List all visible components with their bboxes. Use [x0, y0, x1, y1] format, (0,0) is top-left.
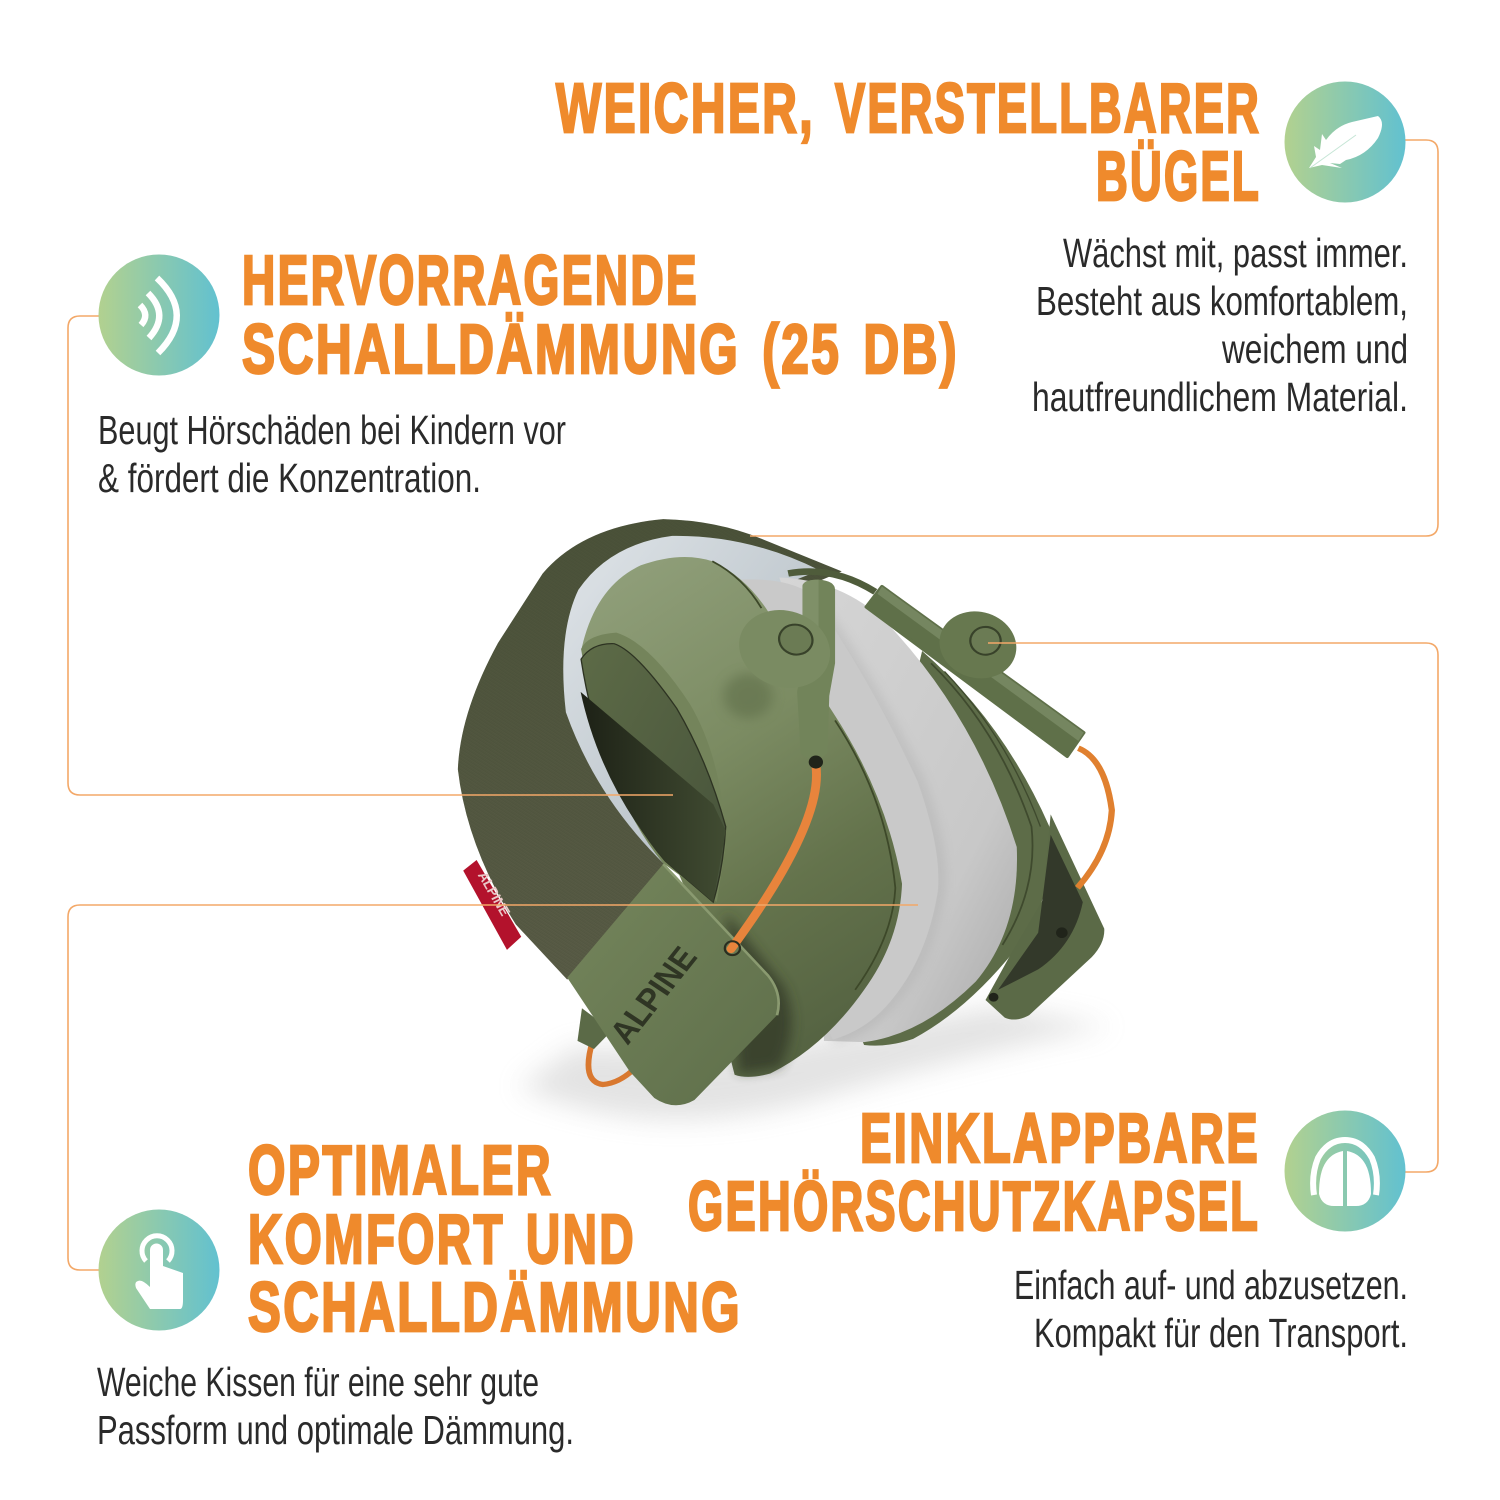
lower screw [989, 993, 998, 1002]
front orange wire [731, 765, 817, 949]
text: comfort [97, 1359, 574, 1453]
heading: foldable cup: EINKLAPPBARE [860, 1099, 1260, 1177]
inner cup bevel [581, 633, 726, 902]
text: comfort: Passform und optimale Dämmung. [97, 1407, 574, 1453]
heading: foldable cup [688, 1099, 1260, 1245]
text: headband: weichem und [1221, 326, 1408, 372]
front cushion [739, 579, 938, 1040]
heading: comfort: OPTIMALER [248, 1131, 553, 1209]
lower arm stub [577, 1008, 612, 1049]
heading: sound insulation: HERVORRAGENDE [242, 241, 699, 319]
heading: sound insulation [242, 241, 959, 388]
heading: headband: WEICHER, [556, 69, 815, 147]
ALPINE embossed lettering: ALPINE [603, 941, 705, 1051]
fabric headband [458, 519, 842, 980]
heading: sound insulation: SCHALLDÄMMUNG (25 DB) [242, 310, 959, 388]
inner pad of headband [563, 536, 819, 865]
heading: headband: VERSTELLBARER [835, 69, 1261, 147]
text: sound insulation: & fördert die Konzentration. [98, 455, 481, 501]
back green shell [842, 651, 1051, 1046]
text: comfort: Weiche Kissen für eine sehr gute [97, 1359, 539, 1405]
dark triangle [581, 692, 726, 902]
back plate screw [1056, 927, 1068, 938]
wire eyelets [725, 941, 740, 955]
text: headband [1032, 230, 1408, 420]
floor shadow [520, 1006, 1110, 1119]
cushion seam shadow [811, 594, 940, 1040]
heading: headband: BÜGEL [1096, 137, 1261, 215]
heading: headband [556, 69, 1261, 215]
icon: folded ear muffs [1284, 1110, 1406, 1232]
text: sound insulation [98, 407, 566, 501]
icon: tapping finger [98, 1210, 220, 1330]
main cup [582, 557, 902, 1077]
rear cushion [779, 578, 1017, 1042]
label text: ALPINE [475, 869, 513, 918]
top cable to arm [788, 572, 875, 592]
connector: foldable cup [988, 643, 1438, 1172]
hinge shadow bump [723, 673, 773, 718]
front hinge arm [723, 580, 846, 769]
back plate [986, 814, 1104, 1020]
icon: sound waves [98, 254, 220, 376]
text: sound insulation: Beugt Hörschäden bei Kindern vor [98, 407, 566, 453]
connector: headband [750, 140, 1438, 536]
product: folded ear defenders [458, 519, 1112, 1119]
bottom orange loop [588, 1041, 636, 1085]
back orange wire [1077, 748, 1112, 888]
icon: feather [1284, 82, 1406, 202]
connector: sound insulation [68, 316, 673, 795]
red label [463, 860, 521, 950]
front plate [567, 864, 779, 1105]
heading: comfort [248, 1131, 742, 1346]
dark lower shading of cup [726, 912, 792, 1074]
inner panel [581, 644, 726, 902]
heading: comfort: KOMFORT UND [248, 1200, 636, 1278]
heading: comfort: SCHALLDÄMMUNG [248, 1268, 742, 1346]
text: foldable cup [1014, 1262, 1408, 1356]
top hinge arm [866, 587, 1084, 756]
connector: comfort [68, 905, 918, 1270]
